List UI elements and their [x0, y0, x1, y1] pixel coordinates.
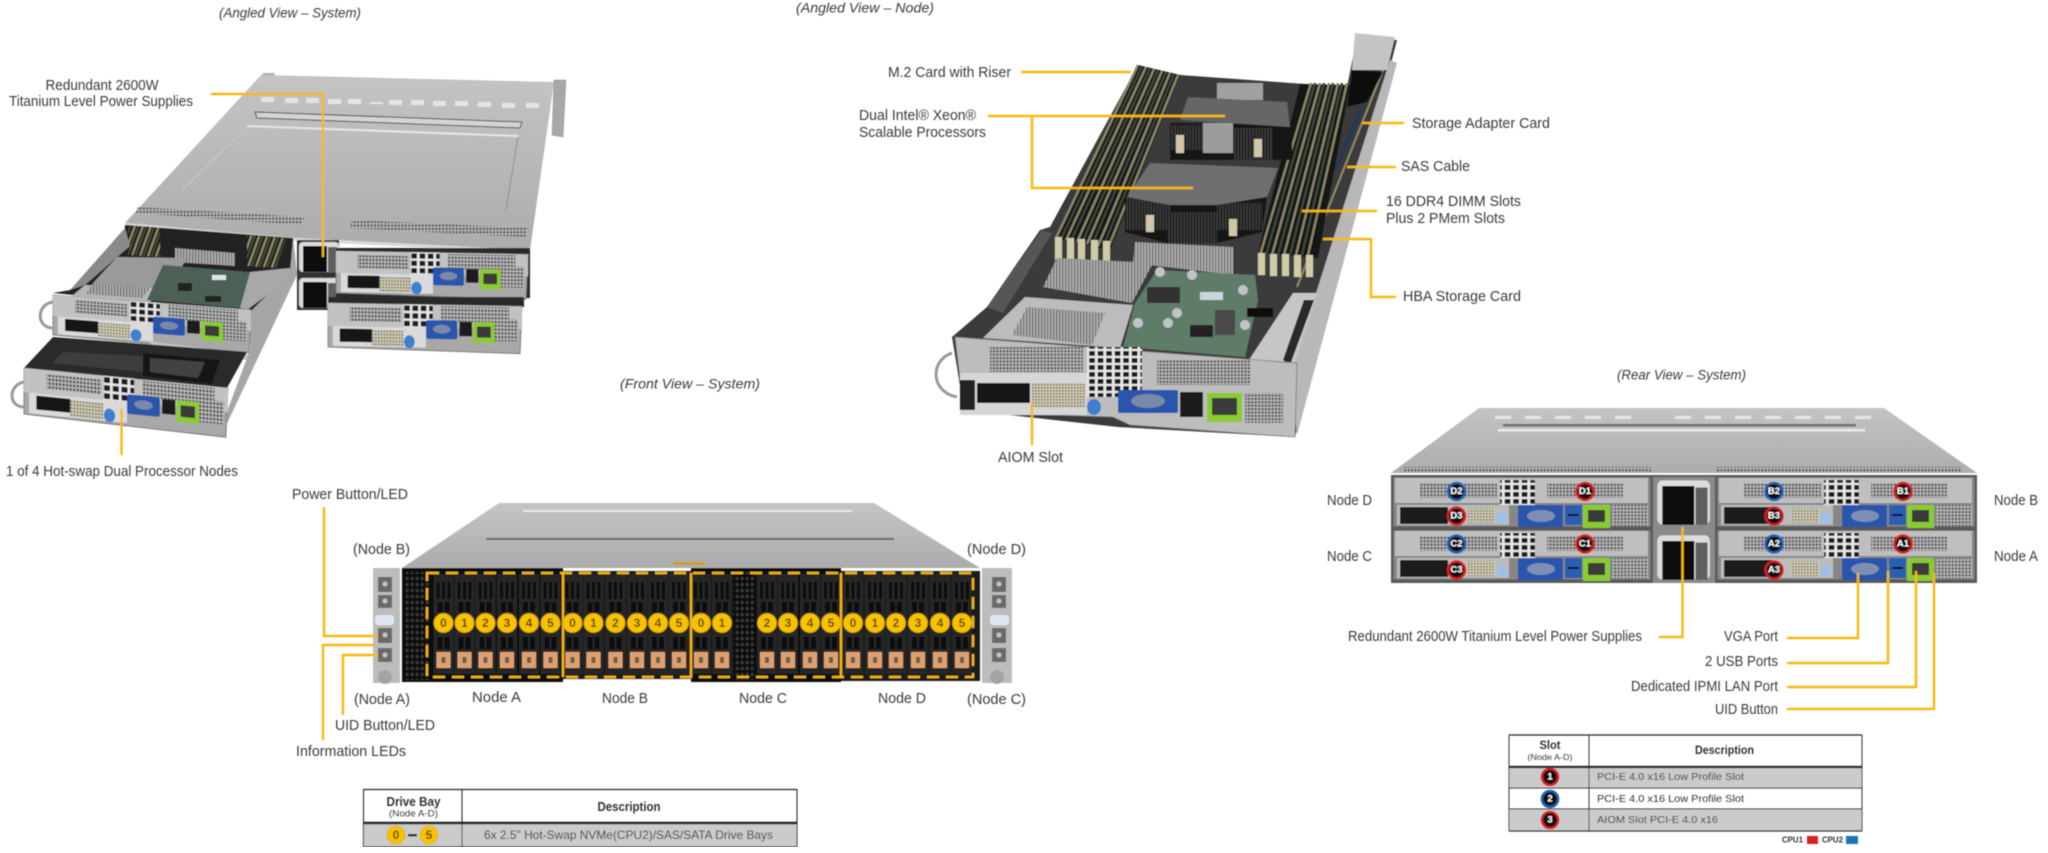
drive bay number markers: 3 [915, 616, 922, 630]
leader line: SAS cable [1347, 166, 1396, 168]
left mounting ear [373, 568, 400, 684]
label: information LEDs: Information LEDs [296, 744, 406, 760]
table: drive bay [364, 789, 797, 847]
row: slot 1: 1 [1547, 772, 1553, 782]
node lower tray lip [148, 341, 248, 360]
slot badges: node C [1448, 536, 1594, 578]
drive bay number markers: 3 [504, 616, 511, 630]
icon: node handle [12, 382, 24, 407]
row: slot 3: AIOM Slot PCI-E 4.0 x16 [1597, 814, 1718, 826]
slot badges: node D: D3 [1450, 510, 1463, 522]
chassis top cover [1391, 408, 1977, 473]
right corner bracket [1247, 293, 1317, 370]
label: VGA port: VGA Port [1724, 629, 1778, 645]
label: node C: Node C [739, 691, 787, 707]
label: SAS cable: SAS Cable [1401, 159, 1470, 175]
label: redundant power supplies: Redundant 2600W Titanium Level Power Supplies [1348, 629, 1642, 645]
label: node D: Node D [878, 691, 926, 707]
heading: rear view: (Rear View – System) [1617, 368, 1746, 382]
rear power supplies [1653, 477, 1715, 583]
slot badges: node C: C2 [1450, 538, 1463, 550]
rear node D [1393, 477, 1651, 528]
rear node B [1717, 477, 1975, 528]
drive bay number markers: 4 [937, 616, 944, 630]
drive bay number markers: 0 [440, 616, 447, 630]
icon: drive bay range: 5 [426, 828, 433, 842]
row: slot 2: 2 [1547, 794, 1553, 804]
drive bay number markers: 1 [719, 616, 726, 630]
label: node A corner: (Node A) [354, 692, 410, 708]
label: HBA storage card: HBA Storage Card [1403, 289, 1521, 305]
drive bay number markers: 5 [676, 616, 683, 630]
panel: rear view of system [1327, 368, 2038, 844]
heatsink cage [983, 297, 1133, 348]
label: storage adapter card: Storage Adapter Card [1412, 116, 1550, 132]
label: node A: Node A [472, 690, 521, 706]
icon: drive bay range [387, 826, 438, 844]
panel: angled view of system [6, 6, 566, 480]
row: slot 1: PCI-E 4.0 x16 Low Profile Slot [1597, 771, 1744, 783]
node: right upper [336, 248, 530, 300]
legend: CPU colours: CPU2 [1822, 836, 1844, 844]
rear processor heatsink [1170, 83, 1292, 160]
label: M.2 card: M.2 Card with Riser [888, 65, 1011, 81]
slot badges: node A [1766, 536, 1912, 578]
label: redundant power supplies: Redundant 2600W [46, 78, 159, 94]
label: processors: Scalable Processors [859, 125, 986, 141]
label: UID button: UID Button/LED [335, 718, 435, 734]
label: node B corner: (Node B) [353, 542, 410, 558]
label: power button: Power Button/LED [292, 487, 408, 503]
drive bay number markers: 2 [612, 616, 619, 630]
heading: angled view system: (Angled View – System) [219, 6, 361, 20]
drive bay number markers: 3 [785, 616, 792, 630]
leader line: UID button [343, 655, 378, 715]
rear node C [1393, 530, 1651, 581]
label: processors: Dual Intel® Xeon® [859, 108, 976, 124]
label: node A: Node A [1994, 549, 2038, 565]
leader line: hot-swap nodes [120, 408, 123, 455]
slot badges: node B [1766, 483, 1912, 524]
drive bay number markers: 1 [461, 616, 468, 630]
right mounting ear [982, 568, 1012, 684]
table: drive bay: Description [598, 800, 660, 814]
drive bay number markers: 1 [590, 616, 597, 630]
leader line: HBA card [1323, 239, 1396, 297]
drive bay number markers: 4 [807, 616, 814, 630]
drive bay number markers: 5 [547, 616, 554, 630]
drive bay number markers: 3 [634, 616, 641, 630]
label: hot-swap nodes: 1 of 4 Hot-swap Dual Processor Nodes [6, 464, 238, 480]
label: USB ports: 2 USB Ports [1705, 654, 1778, 670]
drive bay number markers: 2 [764, 616, 771, 630]
front processor heatsink [1125, 163, 1278, 243]
node boundary dashes [427, 573, 973, 677]
icon: drive bay range: 0 [393, 828, 400, 842]
row: slot 1 [1542, 769, 1744, 785]
slot badges: node A: A2 [1768, 538, 1780, 550]
slot badges: node D: D1 [1579, 486, 1592, 497]
node: extended upper left [40, 225, 297, 433]
node front panel [936, 337, 1297, 437]
chassis rear [1391, 475, 1977, 583]
chipset heatsinks [1043, 242, 1233, 303]
leader line: DIMM slots [1302, 210, 1377, 212]
leader line: power button [324, 507, 378, 636]
label: node B: Node B [602, 691, 648, 707]
label: UID button: UID Button [1715, 702, 1778, 718]
drive bay number markers: 2 [893, 616, 900, 630]
label: node B: Node B [1994, 493, 2038, 509]
label: DIMM slots: 16 DDR4 DIMM Slots [1386, 194, 1521, 210]
leader line: VGA port [1787, 573, 1858, 638]
node: right lower [328, 297, 524, 354]
drive bay number markers: 0 [698, 616, 705, 630]
row: slot 3: 3 [1547, 814, 1553, 826]
label: DIMM slots [1386, 194, 1521, 227]
drive bay number markers: 0 [569, 616, 576, 630]
table: slots: Description [1695, 745, 1754, 757]
slot badges: node B: B1 [1897, 486, 1910, 497]
slot badges: node D: D2 [1450, 486, 1463, 497]
panel: angled view of node [796, 0, 1550, 466]
drive bay number markers: 4 [526, 616, 533, 630]
rear node A [1717, 530, 1975, 581]
label: node D: Node D [1327, 493, 1372, 509]
node right rail [1290, 33, 1397, 435]
icon: node handle [936, 353, 957, 397]
leader line: USB ports [1787, 571, 1888, 663]
motherboard [1123, 267, 1273, 357]
node tray base [952, 37, 1397, 437]
leader line: power supplies [1659, 527, 1682, 637]
table: slots: (Node A-D) [1528, 752, 1573, 762]
slot badges: node C: C3 [1450, 564, 1463, 576]
leader line: power supplies [211, 94, 323, 257]
heading: angled view node: (Angled View – Node) [796, 0, 934, 16]
leader line: IPMI LAN port [1787, 571, 1916, 687]
panel: front view of system [292, 376, 1026, 847]
node: extended lower left [12, 337, 247, 437]
leader line: UID button [1787, 573, 1934, 709]
drive bay number markers [434, 614, 972, 632]
table: drive bay: 6x 2.5" Hot-Swap NVMe(CPU2)/SAS/SATA Drive Bays [484, 828, 773, 842]
leader line: storage adapter [1362, 122, 1404, 124]
redundant power supplies in chassis [297, 240, 339, 310]
left DIMM slots [1055, 65, 1180, 264]
label: DIMM slots: Plus 2 PMem Slots [1386, 211, 1505, 227]
drive bay number markers: 1 [872, 616, 879, 630]
slot badges: node B: B3 [1768, 510, 1780, 522]
slot badges: node A: A3 [1768, 564, 1780, 576]
leader line: AIOM slot [1031, 403, 1033, 445]
drive bay number markers: 2 [482, 616, 489, 630]
label: redundant power supplies [9, 78, 193, 110]
row: slot 2: PCI-E 4.0 x16 Low Profile Slot [1597, 793, 1744, 805]
label: node D corner: (Node D) [967, 542, 1026, 558]
slot badges: node D [1448, 483, 1594, 524]
drive bay number markers: 4 [655, 616, 662, 630]
icon: node handle [40, 302, 53, 328]
table: drive bay: (Node A-D) [389, 808, 438, 820]
slot badges: node C: C1 [1579, 538, 1592, 550]
right DIMM slots [1258, 83, 1350, 277]
leader line: processors [988, 116, 1225, 188]
legend: CPU colours: CPU1 [1782, 836, 1804, 844]
heading: front view: (Front View – System) [620, 376, 760, 392]
legend: CPU colours [1782, 836, 1858, 844]
label: processors [859, 108, 986, 141]
table: drive bay: Drive Bay [386, 795, 441, 809]
label: AIOM slot: AIOM Slot [998, 450, 1063, 466]
label: node C corner: (Node C) [967, 692, 1026, 708]
label: IPMI LAN port: Dedicated IPMI LAN Port [1631, 679, 1778, 695]
leader line: information LEDs [323, 645, 376, 740]
left rail bar [987, 230, 1052, 313]
label: redundant power supplies: Titanium Level Power Supplies [9, 94, 193, 110]
label: node C: Node C [1327, 549, 1372, 565]
table: slots [1509, 735, 1862, 831]
leader line: M.2 card [1021, 71, 1131, 73]
row: slot 2 [1542, 791, 1744, 807]
drive bays [402, 568, 980, 682]
table: slots: Slot [1540, 740, 1561, 752]
slot badges: node B: B2 [1768, 486, 1780, 497]
drive bay number markers: 5 [828, 616, 835, 630]
row: slot 3 [1542, 812, 1718, 828]
server chassis: top cover [125, 73, 566, 253]
slot badges: node A: A1 [1897, 538, 1910, 550]
chassis top cover [402, 503, 980, 568]
drive bay number markers: 0 [850, 616, 857, 630]
drive bay number markers: 5 [959, 616, 966, 630]
